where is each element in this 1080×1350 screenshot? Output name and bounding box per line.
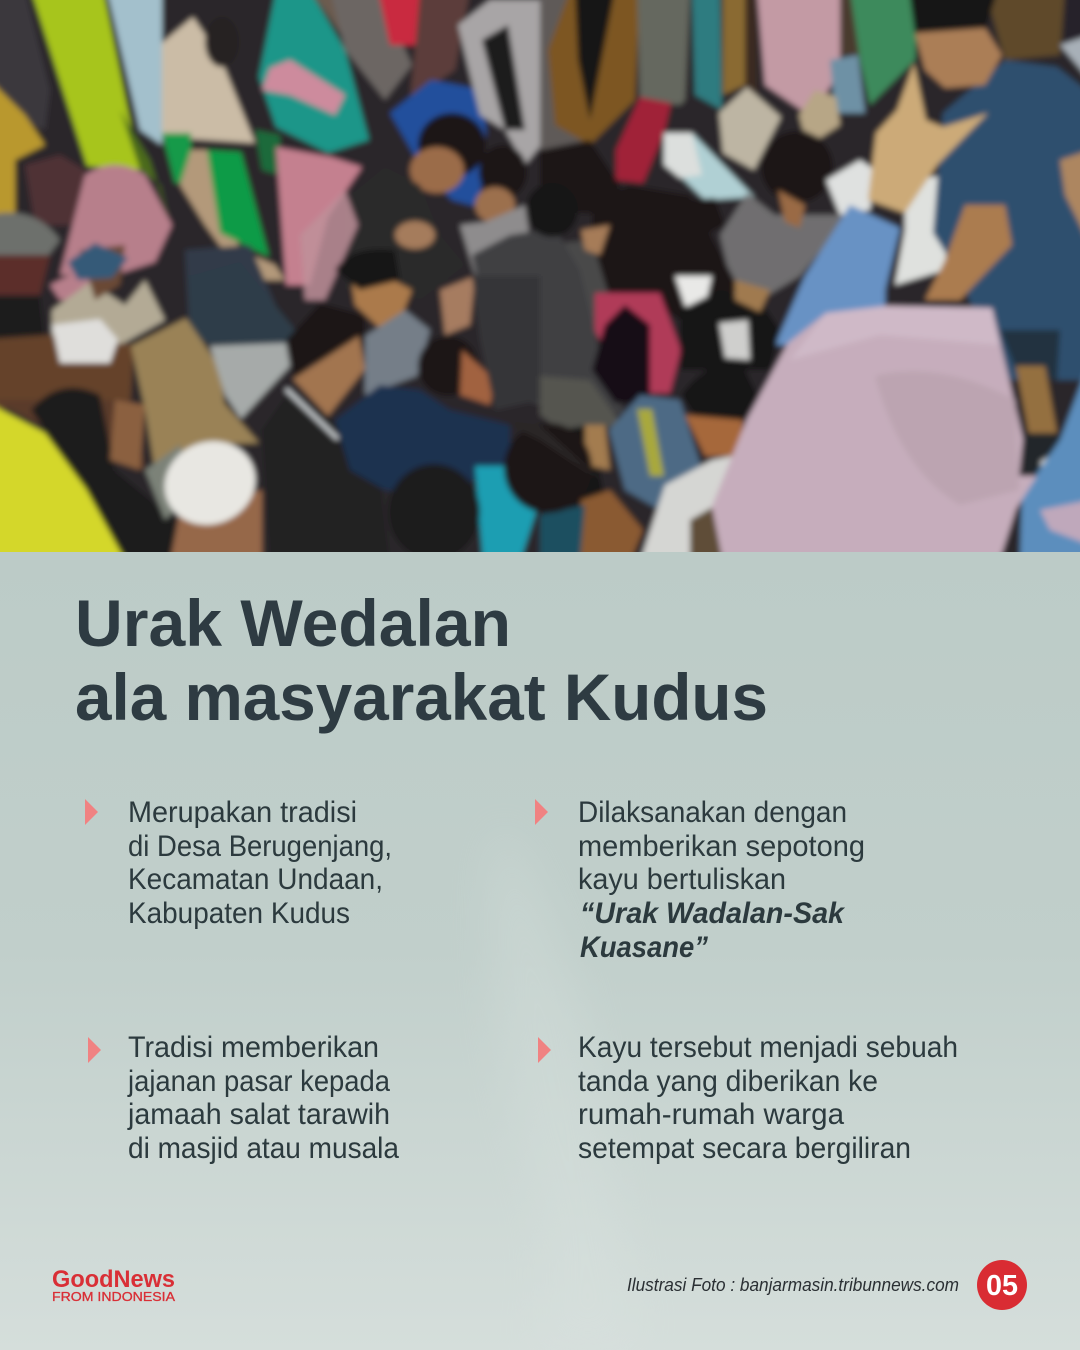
bullet 4: setempat secara bergiliran — [578, 1132, 911, 1165]
bullet 2 — [535, 796, 865, 964]
bullet 4 — [538, 1031, 958, 1165]
title — [75, 586, 768, 734]
photo: central group — [472, 183, 780, 562]
bullet 3: Tradisi memberikan — [128, 1031, 379, 1064]
bullet 2: “Urak Wadalan-Sak — [580, 897, 845, 930]
bullet 3: jajanan pasar kepada — [127, 1065, 390, 1098]
bullet 4: tanda yang diberikan ke — [578, 1065, 878, 1098]
bullet 4: rumah-rumah warga — [578, 1098, 844, 1131]
bullet 2: kayu bertuliskan — [578, 863, 786, 896]
title: Urak Wedalan — [75, 586, 511, 660]
bullet 2: Dilaksanakan dengan — [578, 796, 847, 829]
photo credit: Ilustrasi Foto : banjarmasin.tribunnews.com — [627, 1275, 959, 1295]
icon: arrow marker — [535, 799, 548, 825]
bullet 1: Kabupaten Kudus — [128, 897, 350, 930]
bullet 1: Merupakan tradisi — [128, 796, 357, 829]
bullet 2: memberikan sepotong — [578, 830, 865, 863]
page number badge: 05 — [986, 1270, 1018, 1302]
title: ala masyarakat Kudus — [75, 660, 768, 734]
bullet 1 — [85, 796, 392, 930]
photo: right foreground — [712, 306, 1080, 562]
icon: arrow marker — [538, 1037, 551, 1063]
photo: lower left group — [0, 190, 600, 562]
bullet 1: di Desa Berugenjang, — [128, 830, 392, 863]
logo: GoodNews from Indonesia: FROM INDONESIA — [52, 1290, 176, 1304]
icon: arrow marker — [88, 1037, 101, 1063]
icon: arrow marker — [85, 799, 98, 825]
bullet 3: di masjid atau musala — [128, 1132, 399, 1165]
bullet 3 — [88, 1031, 399, 1165]
bullet 1: Kecamatan Undaan, — [128, 863, 383, 896]
logo: GoodNews from Indonesia: GoodNews — [52, 1266, 175, 1293]
photo: upper left crowd — [0, 0, 565, 300]
bullet 4: Kayu tersebut menjadi sebuah — [578, 1031, 958, 1064]
page number badge — [977, 1260, 1027, 1310]
photo: crowd at the mosque — [0, 0, 1080, 580]
textured background panel — [0, 552, 1080, 1350]
bullet 2: Kuasane” — [580, 931, 708, 964]
photo: upper right crowd — [540, 0, 1080, 380]
bullet 3: jamaah salat tarawih — [127, 1098, 390, 1131]
